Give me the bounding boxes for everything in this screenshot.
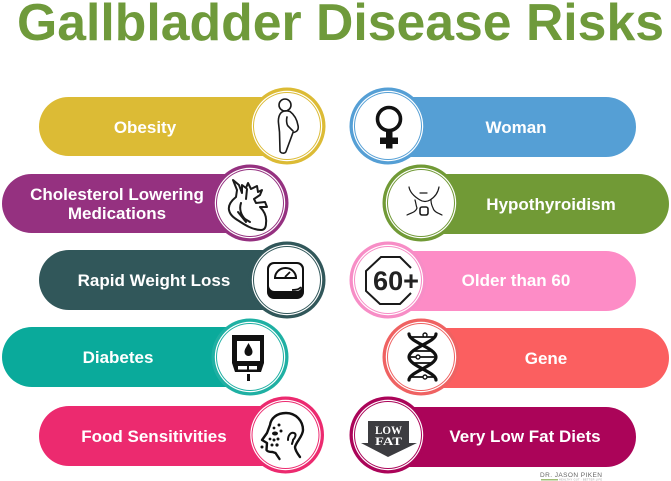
label: hypothyroidism: Hypothyroidism — [486, 195, 616, 214]
label: rapid weight loss: Rapid Weight Loss — [78, 271, 230, 290]
label: gene: Gene — [525, 349, 567, 368]
label: very low fat diets: Very Low Fat Diets — [449, 427, 601, 446]
icon: 60+ octagon: 60+ — [373, 266, 419, 296]
panel: gene — [382, 318, 669, 396]
label: diabetes: Diabetes — [83, 348, 153, 367]
panel: woman — [350, 88, 636, 164]
icon: head with rash — [260, 413, 303, 459]
icon: DNA helix — [409, 333, 436, 380]
label: cholesterol lowering medications: Cholesterol Lowering — [30, 185, 204, 204]
icon: heart — [229, 180, 267, 230]
logo: Dr. Jason Piken: DR. JASON PIKEN — [540, 472, 602, 479]
panel: hypothyroidism — [382, 164, 669, 242]
label: woman: Woman — [485, 118, 547, 137]
icon: obese person — [278, 99, 298, 153]
label: obesity: Obesity — [114, 118, 177, 137]
icon: female symbol — [378, 108, 400, 148]
panel: very low fat diets — [350, 396, 636, 474]
icon: neck and thyroid — [407, 187, 442, 215]
panel: cholesterol lowering medications: Medications — [68, 204, 166, 223]
panel: food sensitivities — [39, 396, 324, 474]
icon: weighing scale — [267, 262, 304, 299]
icon: glucose meter — [232, 335, 264, 381]
icon: low fat arrow: FAT — [375, 434, 402, 448]
panel: rapid weight loss — [39, 242, 326, 318]
label: older than 60: Older than 60 — [462, 271, 570, 290]
icon: 60+ octagon — [366, 257, 419, 304]
icon: low fat arrow: LOW — [375, 423, 402, 437]
icon: low fat arrow — [361, 421, 417, 457]
panel: obesity — [39, 88, 326, 164]
panel: diabetes — [2, 318, 288, 396]
panel: cholesterol lowering medications — [2, 164, 288, 242]
panel: older than 60 — [350, 242, 636, 318]
label: food sensitivities: Food Sensitivities — [81, 427, 227, 446]
